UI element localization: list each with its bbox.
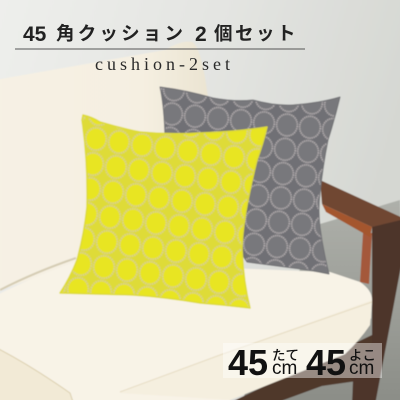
sofa rear post [360, 233, 372, 284]
gray cushion [160, 87, 340, 274]
badge background [223, 343, 382, 378]
width label: よこ [349, 348, 376, 363]
title word set: 個セット [214, 23, 298, 44]
seat seam lines [120, 302, 372, 392]
subtitle: cushion-2set [95, 54, 230, 74]
height value: 45 [228, 342, 268, 383]
sofa base lower left [0, 347, 74, 400]
title underline [15, 48, 305, 50]
sofa seat cushion [0, 262, 372, 400]
armrest top [320, 180, 400, 227]
sofa backrest [0, 42, 208, 292]
floor [240, 200, 400, 400]
sofa front rail [225, 335, 378, 400]
title number 2: 2 [195, 23, 207, 46]
size badge [223, 342, 382, 383]
seat front strip [120, 300, 372, 400]
sofa front post [352, 216, 400, 400]
yellow cushion [60, 115, 267, 308]
height unit: cm [272, 358, 297, 379]
title number 45: 45 [23, 23, 47, 46]
backrest shadow gap [0, 258, 76, 290]
title [23, 23, 298, 46]
height label: たて [272, 348, 299, 363]
armrest underside [322, 204, 372, 237]
width unit: cm [349, 358, 374, 379]
width value: 45 [306, 342, 346, 383]
title word cushion: 角クッション [56, 23, 186, 44]
